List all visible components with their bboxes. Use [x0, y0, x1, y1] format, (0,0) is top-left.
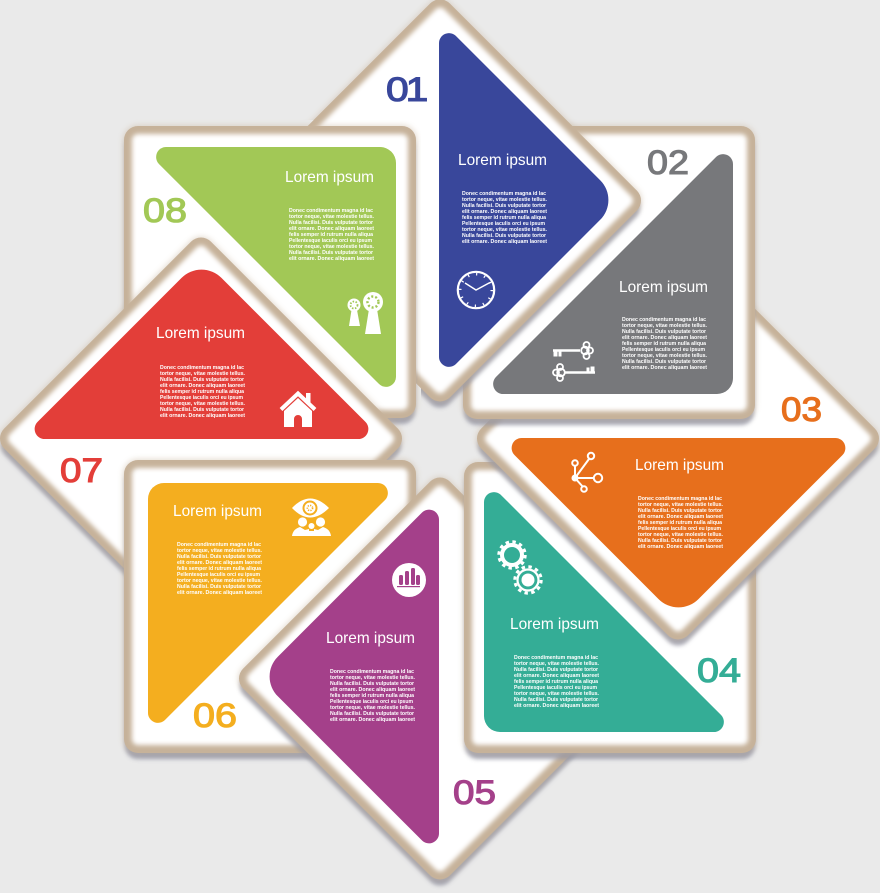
text block 06 — [177, 542, 263, 596]
text block 03: tortor neque, vitae molestie tellus. — [638, 502, 724, 508]
text block 07: tortor neque, vitae molestie tellus. — [160, 401, 246, 407]
number 06: 06 — [193, 697, 237, 735]
text block 03: Pellentesque iaculis orci eu ipsum — [638, 526, 721, 532]
text block 07: Nulla facilisi. Duis vulputate tortor — [160, 407, 244, 413]
triangle 03 — [512, 438, 845, 607]
text block 07: Donec condimentum magna id lac — [160, 365, 244, 371]
text block 05: tortor neque, vitae molestie tellus. — [330, 675, 416, 681]
text block 01: elit ornare. Donec aliquam laoreet — [462, 239, 547, 245]
text block 05: Nulla facilisi. Duis vulputate tortor — [330, 681, 414, 687]
text block 02: elit ornare. Donec aliquam laoreet — [622, 365, 707, 371]
text block 08: Donec condimentum magna id lac — [289, 208, 373, 214]
panel 07: red — [14, 252, 388, 632]
text block 02: Nulla facilisi. Duis vulputate tortor — [622, 359, 706, 365]
panel 04: teal — [478, 476, 742, 746]
text block 01: tortor neque, vitae molestie tellus. — [462, 227, 548, 233]
panel 02: gray — [477, 140, 741, 412]
text block 02: elit ornare. Donec aliquam laoreet — [622, 335, 707, 341]
triangle 05 — [270, 510, 439, 843]
tile 05 — [253, 492, 627, 872]
text block 05: Nulla facilisi. Duis vulputate tortor — [330, 711, 414, 717]
icon: eye and people — [292, 498, 331, 536]
text block 04: tortor neque, vitae molestie tellus. — [514, 661, 600, 667]
triangle 07 — [35, 270, 368, 439]
text block 04: Donec condimentum magna id lac — [514, 655, 598, 661]
text block 03: Nulla facilisi. Duis vulputate tortor — [638, 508, 722, 514]
triangle 06 — [148, 483, 388, 723]
panel 03: orange — [491, 252, 865, 632]
text block 07: elit ornare. Donec aliquam laoreet — [160, 413, 245, 419]
text block 02: Pellentesque iaculis orci eu ipsum — [622, 347, 705, 353]
tile 04 — [478, 476, 742, 746]
text block 06: felis semper id rutrum nulla aliqua — [177, 566, 261, 572]
text block 07 — [160, 365, 246, 419]
icon: clock — [458, 272, 494, 308]
text block 03: tortor neque, vitae molestie tellus. — [638, 532, 724, 538]
number 08: 08 — [143, 192, 187, 230]
text block 07: Pellentesque iaculis orci eu ipsum — [160, 395, 243, 401]
text block 04 — [514, 655, 600, 709]
panel 08: green — [138, 140, 402, 411]
text block 03: Nulla facilisi. Duis vulputate tortor — [638, 538, 722, 544]
heading 07: Lorem ipsum — [156, 325, 245, 342]
text block 03: Donec condimentum magna id lac — [638, 496, 722, 502]
text block 04: Pellentesque iaculis orci eu ipsum — [514, 685, 597, 691]
triangle 04 — [484, 492, 724, 732]
text block 04: elit ornare. Donec aliquam laoreet — [514, 673, 599, 679]
text block 02 — [622, 317, 708, 371]
text block 04: Nulla facilisi. Duis vulputate tortor — [514, 667, 598, 673]
text block 08: felis semper id rutrum nulla aliqua — [289, 232, 373, 238]
heading 04: Lorem ipsum — [510, 616, 599, 633]
icon: bar chart — [392, 563, 426, 597]
tile 01 — [253, 14, 627, 394]
text block 06: tortor neque, vitae molestie tellus. — [177, 578, 263, 584]
heading 02: Lorem ipsum — [619, 279, 708, 296]
text block 08: Nulla facilisi. Duis vulputate tortor — [289, 220, 373, 226]
panel 05: purple — [253, 492, 627, 872]
text block 01: Donec condimentum magna id lac — [462, 191, 546, 197]
triangle 08 — [156, 147, 396, 387]
icon: keys — [553, 342, 595, 381]
text block 04: felis semper id rutrum nulla aliqua — [514, 679, 598, 685]
text block 02: tortor neque, vitae molestie tellus. — [622, 353, 708, 359]
text block 06: elit ornare. Donec aliquam laoreet — [177, 560, 262, 566]
text block 08: elit ornare. Donec aliquam laoreet — [289, 226, 374, 232]
text block 02: tortor neque, vitae molestie tellus. — [622, 323, 708, 329]
text block 06: Donec condimentum magna id lac — [177, 542, 261, 548]
number 03: 03 — [781, 391, 822, 429]
heading 03: Lorem ipsum — [635, 457, 724, 474]
text block 06: Nulla facilisi. Duis vulputate tortor — [177, 554, 261, 560]
text block 03: felis semper id rutrum nulla aliqua — [638, 520, 722, 526]
text block 07: tortor neque, vitae molestie tellus. — [160, 371, 246, 377]
icon: network nodes — [572, 453, 602, 492]
text block 06: Pellentesque iaculis orci eu ipsum — [177, 572, 260, 578]
text block 08: elit ornare. Donec aliquam laoreet — [289, 256, 374, 262]
text block 03: elit ornare. Donec aliquam laoreet — [638, 514, 723, 520]
text block 08 — [289, 208, 375, 262]
heading 01: Lorem ipsum — [458, 152, 547, 169]
number 04: 04 — [697, 652, 741, 690]
text block 02: felis semper id rutrum nulla aliqua — [622, 341, 706, 347]
text block 07: felis semper id rutrum nulla aliqua — [160, 389, 244, 395]
text block 05: tortor neque, vitae molestie tellus. — [330, 705, 416, 711]
text block 02: Donec condimentum magna id lac — [622, 317, 706, 323]
heading 05: Lorem ipsum — [326, 630, 415, 647]
text block 07: elit ornare. Donec aliquam laoreet — [160, 383, 245, 389]
text block 01: felis semper id rutrum nulla aliqua — [462, 215, 546, 221]
triangle 01 — [439, 33, 608, 367]
tile 07 — [14, 252, 388, 632]
text block 04: Nulla facilisi. Duis vulputate tortor — [514, 697, 598, 703]
text block 05: felis semper id rutrum nulla aliqua — [330, 693, 414, 699]
text block 08: tortor neque, vitae molestie tellus. — [289, 244, 375, 250]
text block 04: tortor neque, vitae molestie tellus. — [514, 691, 600, 697]
text block 01: tortor neque, vitae molestie tellus. — [462, 197, 548, 203]
icon: gears — [499, 542, 541, 593]
text block 07: Nulla facilisi. Duis vulputate tortor — [160, 377, 244, 383]
number 05: 05 — [453, 774, 496, 812]
text block 01: Nulla facilisi. Duis vulputate tortor — [462, 233, 546, 239]
text block 06: Nulla facilisi. Duis vulputate tortor — [177, 584, 261, 590]
text block 06: elit ornare. Donec aliquam laoreet — [177, 590, 262, 596]
text block 05: elit ornare. Donec aliquam laoreet — [330, 687, 415, 693]
text block 05: elit ornare. Donec aliquam laoreet — [330, 717, 415, 723]
number 07: 07 — [60, 452, 103, 490]
panel 06: yellow — [138, 474, 402, 746]
text block 05 — [330, 669, 416, 723]
tile 08 — [138, 140, 402, 411]
text block 05: Donec condimentum magna id lac — [330, 669, 414, 675]
text block 04: elit ornare. Donec aliquam laoreet — [514, 703, 599, 709]
text block 03 — [638, 496, 724, 550]
text block 01: elit ornare. Donec aliquam laoreet — [462, 209, 547, 215]
triangle 02 — [493, 154, 733, 394]
heading 08: Lorem ipsum — [285, 169, 374, 186]
text block 08: tortor neque, vitae molestie tellus. — [289, 214, 375, 220]
text block 01: Pellentesque iaculis orci eu ipsum — [462, 221, 545, 227]
icon: turbines — [348, 292, 383, 334]
text block 02: Nulla facilisi. Duis vulputate tortor — [622, 329, 706, 335]
heading 06: Lorem ipsum — [173, 503, 262, 520]
text block 06: tortor neque, vitae molestie tellus. — [177, 548, 263, 554]
text block 01: Nulla facilisi. Duis vulputate tortor — [462, 203, 546, 209]
text block 08: Nulla facilisi. Duis vulputate tortor — [289, 250, 373, 256]
number 01: 01 — [386, 70, 427, 108]
icon: house — [281, 393, 315, 427]
text block 05: Pellentesque iaculis orci eu ipsum — [330, 699, 413, 705]
tile 03 — [491, 252, 865, 632]
tile 02 — [477, 140, 741, 412]
text block 08: Pellentesque iaculis orci eu ipsum — [289, 238, 372, 244]
text block 01 — [462, 191, 548, 245]
text block 03: elit ornare. Donec aliquam laoreet — [638, 544, 723, 550]
tile 06 — [138, 474, 402, 746]
number 02: 02 — [647, 144, 689, 182]
panel 01: blue — [253, 14, 627, 394]
